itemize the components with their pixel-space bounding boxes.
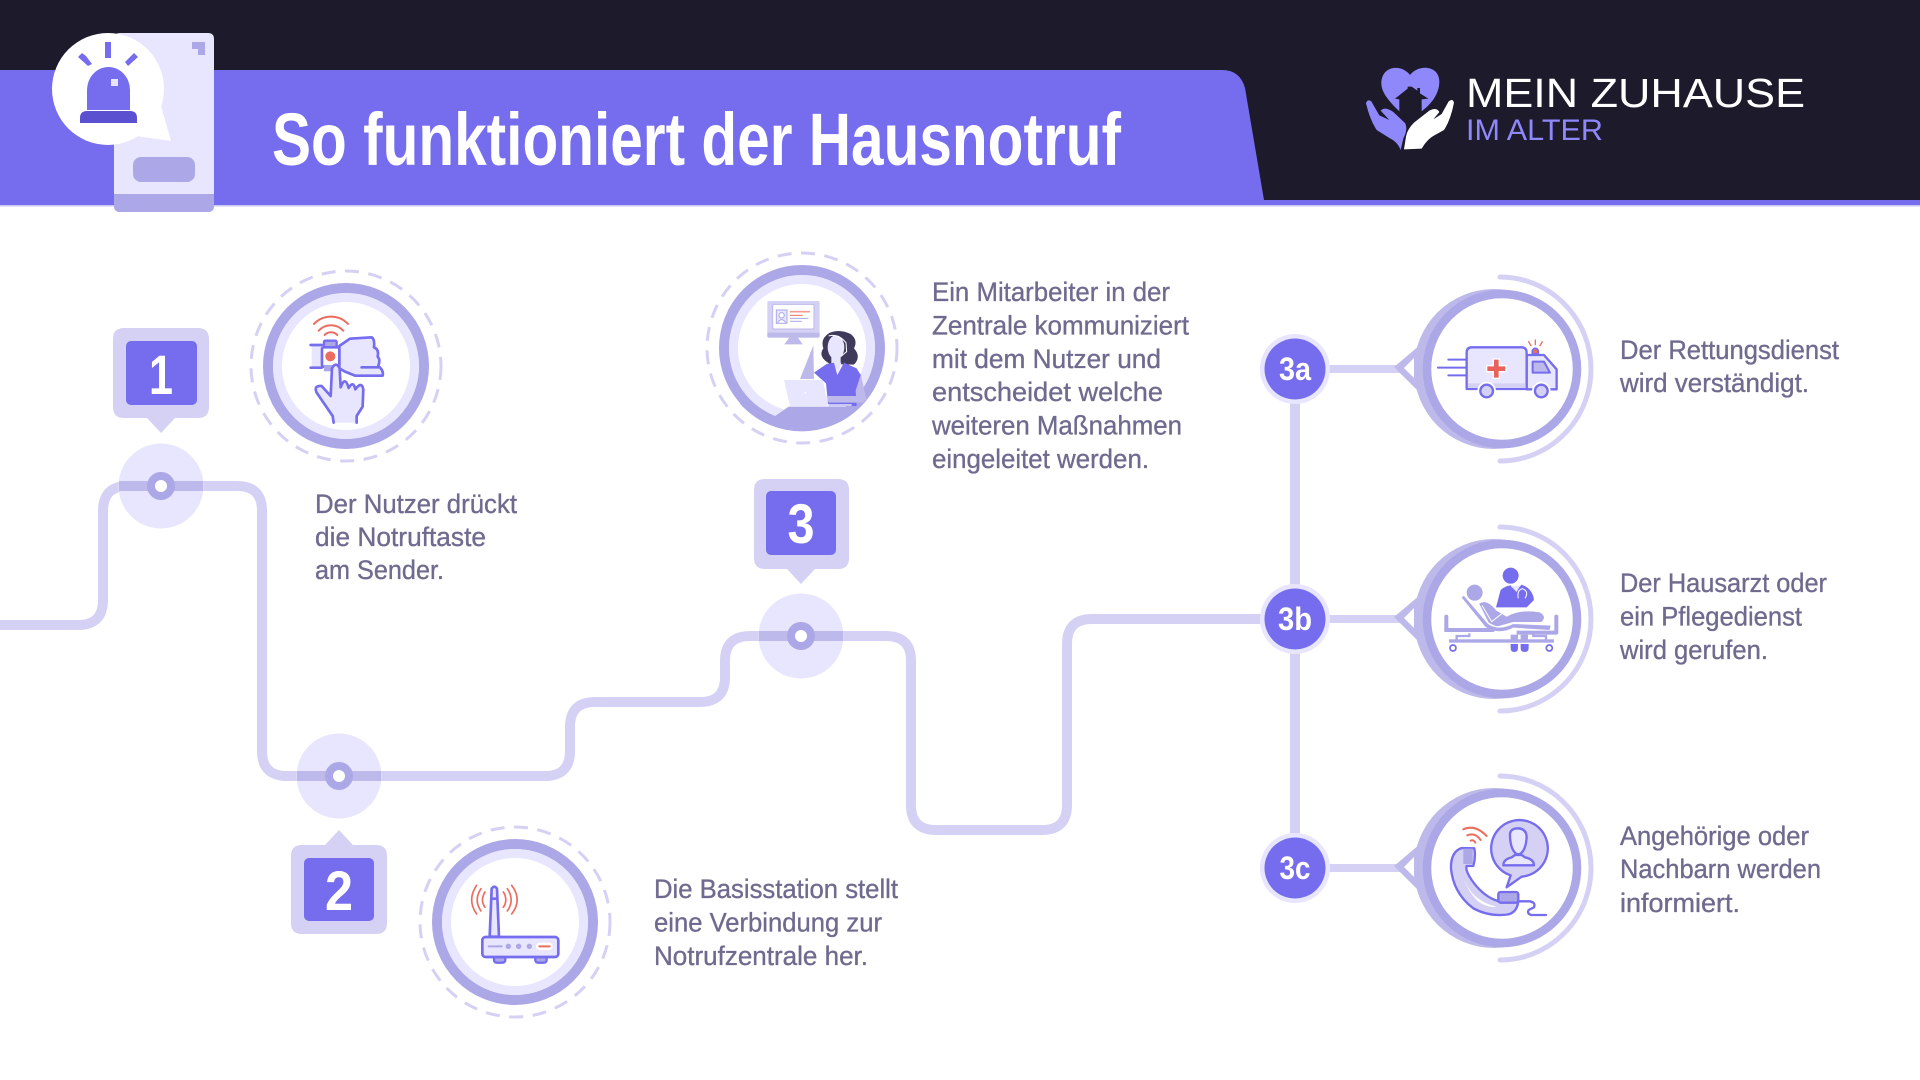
number badge 3: 3 (788, 492, 814, 555)
node 3b: 3b (1278, 601, 1312, 637)
icon: alarm device (52, 33, 214, 212)
node 3a: 3a (1279, 351, 1311, 387)
number badge 1: 1 (149, 343, 173, 406)
number badge 2 (291, 830, 387, 934)
text 3a: wird verständigt. (1619, 368, 1809, 398)
timeline path (0, 369, 1295, 868)
logo tagline: IM ALTER (1466, 114, 1603, 147)
step 3 text: Ein Mitarbeiter in der (932, 277, 1170, 307)
monitor (767, 301, 820, 344)
node 3a (1260, 334, 1330, 404)
number badge 1 (113, 328, 209, 433)
step 3 (707, 253, 1189, 678)
node 2 (296, 734, 382, 818)
text 3a (1619, 335, 1839, 398)
step 1 text: Der Nutzer drückt (315, 489, 517, 519)
branch 3b (1260, 527, 1827, 711)
connector 3b (1295, 615, 1400, 623)
step 3 text: weiteren Maßnahmen (931, 410, 1182, 440)
icon: doctor at bed (1394, 527, 1591, 711)
header band (0, 70, 1264, 205)
node 3c: 3c (1280, 850, 1310, 886)
text 3c: informiert. (1620, 888, 1740, 918)
step 3 text (931, 277, 1189, 474)
text 3b: Der Hausarzt oder (1620, 568, 1827, 598)
connector 3c (1295, 864, 1400, 872)
text 3b: wird gerufen. (1619, 635, 1768, 665)
step 2 text: Die Basisstation stellt (654, 874, 898, 904)
step 1 text: die Notruftaste (315, 522, 486, 552)
text 3c: Nachbarn werden (1620, 854, 1821, 884)
step 2 (291, 734, 898, 1017)
text 3c: Angehörige oder (1620, 821, 1809, 851)
node 1 (118, 444, 204, 528)
number badge 2: 2 (325, 859, 353, 922)
step 3 text: entscheidet welche (932, 377, 1163, 407)
step 2 text (654, 874, 898, 971)
icon: ambulance (1394, 277, 1591, 461)
icon: watch emergency button (251, 271, 441, 461)
node 3 (758, 594, 844, 678)
step 3 text: eingeleitet werden. (932, 444, 1149, 474)
step 1 text (315, 489, 517, 585)
logo name: MEIN ZUHAUSE (1466, 70, 1805, 116)
icon: base station router (420, 827, 610, 1017)
icon: call centre agent (707, 253, 897, 447)
agent (784, 331, 867, 406)
step 2 text: Notrufzentrale her. (654, 941, 868, 971)
logo mark (1366, 68, 1454, 150)
title: So funktioniert der Hausnotruf (272, 98, 1121, 181)
step 1 (113, 271, 517, 585)
desk (740, 401, 866, 432)
connector 3a (1295, 365, 1400, 373)
node 3b (1260, 584, 1330, 654)
node 3c (1260, 833, 1330, 903)
branch 3c (1260, 776, 1821, 960)
text 3c (1620, 821, 1821, 918)
step 3 text: Zentrale kommuniziert (932, 310, 1189, 340)
text 3b (1619, 568, 1827, 665)
step 2 text: eine Verbindung zur (654, 908, 882, 938)
number badge 3 (754, 479, 849, 584)
logo (1366, 68, 1805, 150)
text 3a: Der Rettungsdienst (1620, 335, 1839, 365)
text 3b: ein Pflegedienst (1620, 602, 1802, 632)
header (0, 0, 1920, 212)
step 1 text: am Sender. (315, 555, 444, 585)
branch 3a (1260, 277, 1839, 461)
icon: phone call (1394, 776, 1591, 960)
step 3 text: mit dem Nutzer und (932, 344, 1161, 374)
